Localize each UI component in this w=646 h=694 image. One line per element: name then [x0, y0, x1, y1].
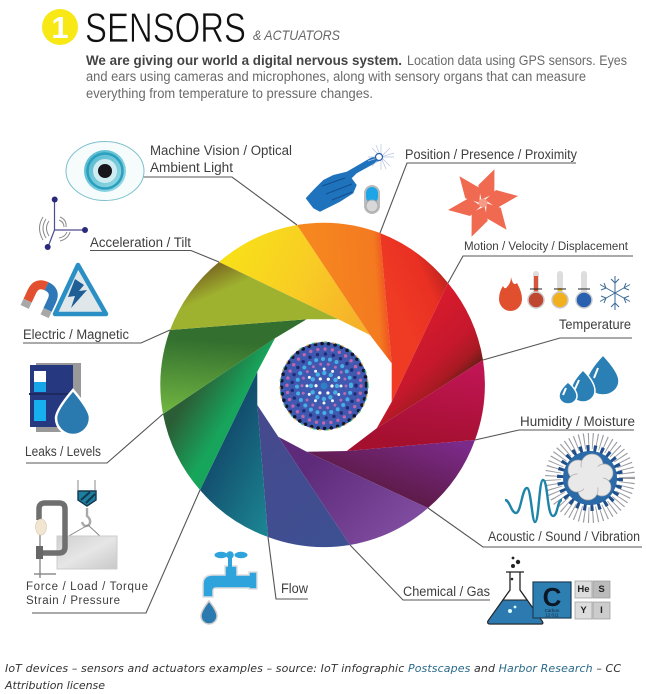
label: Humidity: [475, 414, 635, 440]
label: Motion: Motion / Velocity / Displacement: [464, 241, 629, 253]
blade: green: [163, 338, 275, 490]
caption: Attribution license: [4, 679, 105, 692]
label: Chemical: Chemical / Gas: [403, 584, 490, 599]
icon: water drops: [559, 355, 619, 404]
icon: number 1 badge: 1: [51, 10, 69, 45]
blade: purple: [307, 440, 475, 508]
icon: eye: [66, 142, 144, 200]
centre dot sphere: [280, 342, 368, 430]
icon: barrel and drop: [29, 363, 90, 435]
blade: crimson: [377, 283, 483, 428]
label: Motion: [448, 241, 633, 283]
icon: clamp and hanging load: [34, 480, 117, 578]
blade: lime: [160, 319, 307, 414]
label: Acceleration: Acceleration / Tilt: [90, 235, 191, 250]
icon: pointing hand and switch: [306, 144, 394, 214]
blade: olive: [170, 262, 338, 330]
caption: [4, 662, 621, 692]
intro paragraph: and ears using cameras and microphones, along with sensory organs that can measure: [86, 69, 586, 84]
icon: flask and element tiles: He: [577, 584, 590, 595]
label: Electric: Electric / Magnetic: [23, 327, 129, 342]
label: Position: [380, 147, 577, 233]
icon: acceleration axes: [40, 196, 88, 250]
label: Temperature: [483, 317, 632, 360]
icon: flask and element tiles: [488, 557, 610, 624]
label: Leaks: Leaks / Levels: [25, 444, 101, 459]
blade: red: [380, 233, 448, 402]
icon: flask and element tiles: I: [600, 605, 603, 616]
label: Temperature: Temperature: [559, 317, 631, 332]
label: Force: Strain / Pressure: [26, 595, 120, 607]
icon: fan: [448, 166, 518, 240]
label: Acoustic: [428, 508, 642, 547]
intro paragraph: everything from temperature to pressure changes.: [86, 86, 373, 101]
label: Force: [26, 490, 200, 613]
label: Flow: [268, 537, 308, 599]
icon: flask and element tiles: 12.011: [545, 612, 559, 618]
intro paragraph: Location data using GPS sensors. Eyes: [407, 53, 627, 68]
icon: number 1 badge: [42, 9, 78, 45]
icon: magnet and warning triangle: [21, 265, 106, 318]
icon: temperature set: [499, 271, 630, 311]
label: Humidity: Humidity / Moisture: [520, 414, 635, 429]
blade: navy: [257, 405, 350, 547]
icon: sound wave and burst: [505, 441, 627, 522]
intro paragraph: [86, 53, 627, 101]
title: SENSORS: [85, 4, 246, 51]
label: Acceleration: [90, 235, 219, 262]
blade: teal: [200, 372, 268, 537]
label: Machine Vision: Machine Vision / Optical: [150, 143, 292, 158]
label: Leaks: [25, 414, 163, 463]
icon: flask and element tiles: S: [598, 584, 605, 595]
label: Flow: Flow: [281, 581, 308, 596]
blade: orange: [297, 223, 392, 363]
label: Machine Vision: [143, 143, 297, 225]
caption: IoT devices – sensors and actuators examples – source: IoT infographic Postscapes and Harbor Research – CC: [5, 662, 621, 675]
intro paragraph: We are giving our world a digital nervous system.: [86, 53, 402, 68]
blade: yellow: [219, 225, 370, 335]
label: Position: Position / Presence / Proximity: [405, 147, 577, 162]
icon: water tap: [201, 551, 257, 624]
label: Chemical: [350, 545, 490, 600]
label: Force: Force / Load / Torque: [26, 581, 148, 593]
icon: flask and element tiles: C: [543, 582, 562, 612]
blade: violet: [278, 437, 428, 545]
icon: flask and element tiles: Carbon: [545, 608, 560, 613]
icon: flask and element tiles: Y: [580, 605, 587, 616]
title: & ACTUATORS: [253, 27, 341, 43]
label: Machine Vision: Ambient Light: [150, 160, 233, 175]
blade: magenta: [347, 360, 485, 451]
colour wheel: [160, 223, 485, 547]
